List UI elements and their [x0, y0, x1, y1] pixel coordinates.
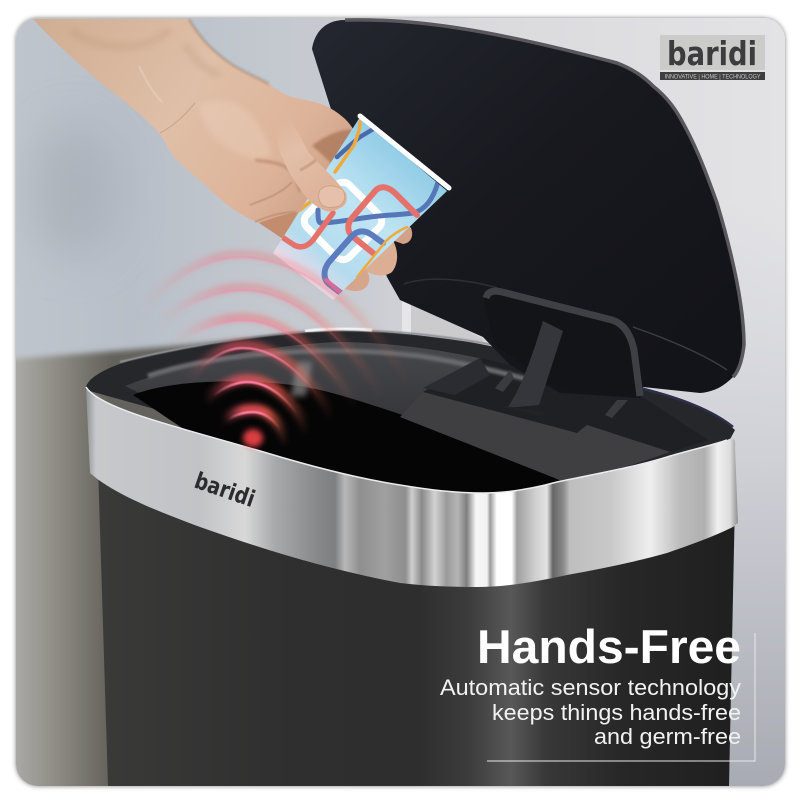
lid edge highlight — [345, 20, 744, 377]
door frame strip — [402, 300, 411, 334]
cup lip — [360, 116, 449, 188]
hinge foot — [423, 358, 490, 395]
description line 1: Automatic sensor technology — [440, 675, 741, 700]
ribbon: orange bottom — [357, 227, 407, 277]
text corner bracket — [487, 633, 755, 761]
vein — [139, 66, 163, 103]
bin opening ring — [86, 330, 735, 481]
wave 6 — [137, 254, 410, 384]
ribbon: white rounded square — [301, 179, 385, 263]
rim top edge — [86, 387, 727, 493]
arm and palm — [33, 19, 353, 250]
wave 4 — [173, 317, 357, 407]
hinge arm — [507, 321, 563, 408]
thumb underside shadow — [255, 160, 300, 192]
lid hinge bracket — [423, 290, 641, 418]
wave 3 — [188, 345, 333, 417]
core 3 — [188, 348, 333, 420]
finger: ring — [340, 264, 369, 291]
back rim reflection — [305, 329, 372, 331]
interior reflection — [291, 362, 312, 396]
right rim edge — [640, 388, 733, 427]
thumb knuckle — [300, 160, 316, 170]
ribbon: coral left — [282, 213, 333, 247]
back rim inner band — [148, 351, 530, 380]
description line 2: keeps things hands-free — [492, 700, 741, 725]
description line 3: and germ-free — [594, 724, 741, 749]
palm shadow — [312, 130, 353, 170]
wall upper — [16, 18, 785, 380]
wall patch under lid — [411, 305, 484, 342]
open lid — [312, 20, 744, 398]
back rim highlight — [120, 330, 540, 362]
core 6 — [137, 257, 410, 387]
wall right — [643, 323, 785, 786]
hand — [33, 19, 412, 291]
wave core — [137, 257, 410, 443]
stainless steel rim — [86, 387, 738, 587]
hinge base — [508, 406, 512, 408]
paper cup — [273, 116, 449, 300]
ribbon: blue loop — [324, 231, 383, 294]
ribbon: orange top — [335, 122, 360, 172]
arm hair shade — [189, 19, 269, 84]
core 1 — [223, 412, 287, 443]
logo plate — [660, 35, 765, 70]
hair texture — [85, 32, 218, 76]
wrist crease — [160, 103, 195, 133]
hinge left clip — [495, 370, 514, 392]
hinge plate — [484, 290, 641, 395]
logo wordmark: baridi — [667, 34, 757, 73]
wall shadow blot — [32, 126, 113, 250]
finger: middle — [362, 236, 397, 275]
ribbon: top navy — [337, 128, 375, 157]
wave glow — [137, 254, 410, 440]
bin body — [98, 465, 735, 786]
logo tagline: INNOVATIVE | HOME | TECHNOLOGY — [664, 74, 760, 80]
sensor waves — [137, 254, 410, 447]
sensor glow — [243, 429, 263, 447]
headline: Hands-Free — [477, 620, 741, 673]
lid inner contour — [633, 327, 727, 370]
palm crease — [250, 182, 296, 222]
ribbon: pink tail — [326, 280, 342, 294]
thumb shape — [277, 113, 347, 211]
knuckle highlight — [202, 103, 270, 158]
thumb nail — [319, 186, 345, 207]
ribbon: navy — [318, 182, 438, 223]
brand logo — [660, 34, 765, 80]
back inner wall — [126, 342, 480, 415]
cup body — [273, 117, 447, 300]
wave 2 — [205, 379, 308, 430]
ribbon: orange left — [300, 202, 310, 210]
core 5 — [157, 290, 383, 400]
inner reflected ledge — [400, 392, 670, 486]
rim logo: baridi — [191, 468, 258, 513]
cup ribbons — [282, 122, 438, 294]
logo strip — [660, 72, 765, 80]
core 4 — [173, 320, 357, 410]
dark shelf above ledge — [423, 358, 708, 452]
bin interior black — [133, 381, 560, 492]
thumb — [277, 113, 347, 211]
hinge right clip — [605, 400, 628, 418]
core 2 — [205, 382, 308, 433]
finger: index — [392, 222, 412, 244]
lower palm shade — [259, 212, 298, 239]
wave 5 — [157, 287, 383, 397]
lid inner contour left — [404, 279, 498, 288]
wall lower left — [16, 330, 304, 786]
ribbon: coral loop — [348, 187, 417, 253]
wave 1 — [223, 409, 287, 440]
hinge plate edge — [486, 291, 640, 396]
